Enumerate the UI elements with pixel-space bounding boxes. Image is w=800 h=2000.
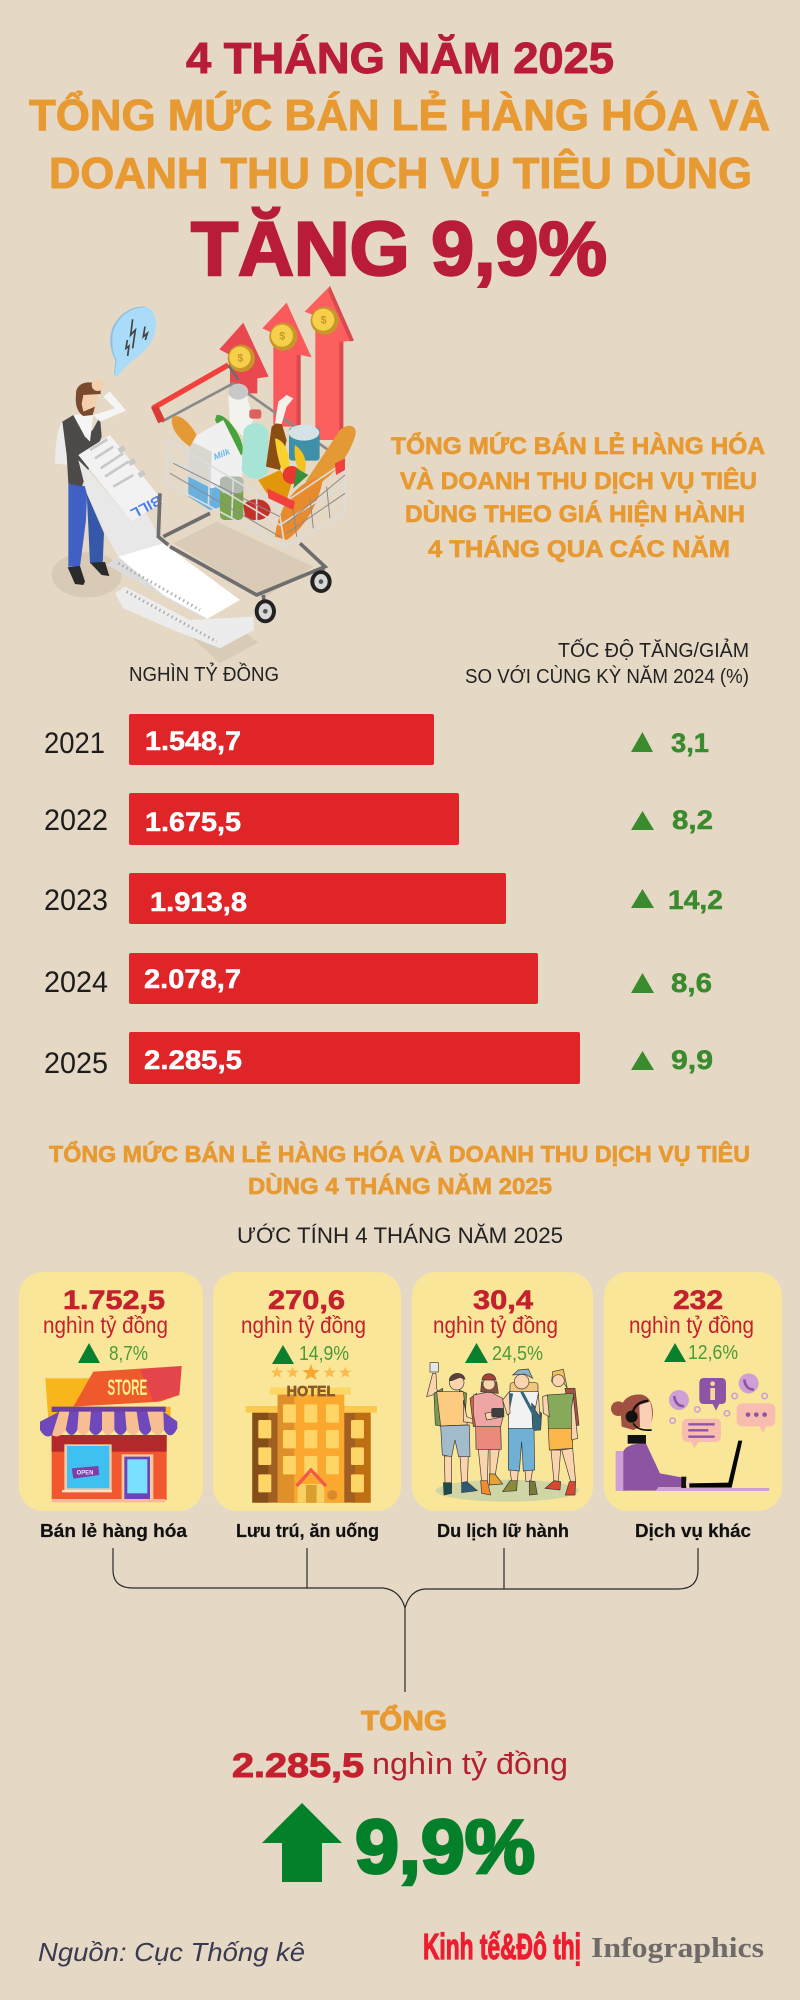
row 2023: 1.913,8	[150, 887, 247, 917]
row 2021: 1.548,7	[145, 726, 241, 756]
illustration: man reading bill beside shopping cart	[52, 286, 356, 663]
row 2023: 14,2	[668, 885, 723, 915]
category labels: Du lịch lữ hành	[437, 1521, 569, 1541]
title: DOANH THU DỊCH VỤ TIÊU DÙNG	[49, 148, 752, 198]
axis label: growth rate: SO VỚI CÙNG KỲ NĂM 2024 (%)	[465, 665, 749, 688]
illustration: man reading bill beside shopping cart: Milk	[212, 446, 232, 462]
row 2025: 2.285,5	[144, 1045, 242, 1075]
row 2024: 2024	[44, 966, 108, 999]
icon: store: STORE	[107, 1375, 147, 1400]
title: 4 THÁNG NĂM 2025	[186, 33, 614, 83]
row 2022	[44, 793, 713, 845]
category labels	[40, 1521, 751, 1541]
row 2021	[44, 714, 709, 765]
panel: accommodation: 270,6	[268, 1285, 345, 1315]
subtitle: 4 THÁNG QUA CÁC NĂM	[428, 535, 730, 563]
panel: accommodation: nghìn tỷ đồng	[241, 1312, 366, 1338]
section heading: DÙNG 4 THÁNG NĂM 2025	[248, 1172, 552, 1199]
panel: accommodation	[213, 1272, 401, 1511]
illustration: man reading bill beside shopping cart: $	[321, 315, 327, 327]
section subheading: ƯỚC TÍNH 4 THÁNG NĂM 2025	[237, 1223, 563, 1248]
row 2022: 8,2	[672, 805, 713, 835]
illustration: man reading bill beside shopping cart: BILL	[128, 492, 164, 522]
row 2023	[44, 873, 723, 924]
panel: other services: nghìn tỷ đồng	[629, 1312, 754, 1338]
bar chart	[44, 714, 723, 1084]
section heading: TỔNG MỨC BÁN LẺ HÀNG HÓA VÀ DOANH THU DỊCH VỤ TIÊU	[49, 1139, 750, 1167]
row 2022: 1.675,5	[145, 807, 241, 837]
title: TỔNG MỨC BÁN LẺ HÀNG HÓA VÀ	[29, 89, 770, 140]
subtitle	[391, 431, 765, 563]
row 2025	[44, 1032, 713, 1084]
panel: travel: 30,4	[473, 1285, 533, 1315]
panel: other services	[604, 1272, 782, 1511]
subtitle: VÀ DOANH THU DỊCH VỤ TIÊU	[400, 467, 757, 495]
icon: hotel	[246, 1364, 377, 1503]
panel: travel	[412, 1272, 593, 1511]
panel: travel: 24,5%	[492, 1343, 543, 1365]
row 2025: 9,9	[671, 1045, 713, 1075]
row 2022: 2022	[44, 804, 108, 837]
icon: tourists	[427, 1363, 579, 1502]
category labels: Dịch vụ khác	[635, 1521, 751, 1541]
title	[29, 33, 770, 292]
icon: hotel: HOTEL	[287, 1384, 335, 1400]
arrow: growth up	[262, 1803, 342, 1882]
category labels: Bán lẻ hàng hóa	[40, 1521, 188, 1541]
total growth: 9,9%	[355, 1805, 535, 1890]
row 2025: 2025	[44, 1047, 108, 1080]
row 2024	[44, 953, 712, 1004]
logo: Kinh tế&Đô thị	[423, 1926, 581, 1967]
row 2024: 8,6	[671, 968, 712, 998]
illustration: man reading bill beside shopping cart: $	[279, 331, 285, 343]
panel: retail: 8,7%	[109, 1343, 148, 1365]
source: Nguồn: Cục Thống kê	[38, 1937, 305, 1967]
section heading	[49, 1139, 750, 1199]
total label: TỔNG	[361, 1705, 447, 1736]
logo: Infographics	[591, 1933, 764, 1964]
panel: other services: 232	[673, 1285, 723, 1315]
panel: travel: nghìn tỷ đồng	[433, 1312, 558, 1338]
subtitle: DÙNG THEO GIÁ HIỆN HÀNH	[405, 500, 745, 528]
icon: store: OPEN	[77, 1471, 93, 1477]
panel: retail	[19, 1272, 203, 1511]
icon: store	[40, 1366, 182, 1502]
row 2021: 2021	[44, 727, 105, 760]
connector bracket	[113, 1548, 698, 1692]
total value	[232, 1746, 568, 1785]
axis label: unit: NGHÌN TỶ ĐỒNG	[129, 662, 279, 686]
subtitle: TỔNG MỨC BÁN LẺ HÀNG HÓA	[391, 431, 765, 460]
panel: accommodation: 14,9%	[299, 1343, 349, 1365]
row 2021: 3,1	[671, 728, 709, 758]
icon: call-centre agent	[611, 1373, 775, 1491]
row 2023: 2023	[44, 884, 108, 917]
panel: retail: 1.752,5	[63, 1285, 165, 1315]
category labels: Lưu trú, ăn uống	[236, 1521, 379, 1541]
total value: nghìn tỷ đồng	[372, 1746, 568, 1781]
panel: other services: 12,6%	[688, 1342, 738, 1364]
axis label: growth rate: TỐC ĐỘ TĂNG/GIẢM	[558, 638, 749, 662]
title: TĂNG 9,9%	[191, 207, 607, 292]
panel: retail: nghìn tỷ đồng	[43, 1312, 168, 1338]
row 2024: 2.078,7	[144, 964, 241, 994]
total value: 2.285,5	[232, 1747, 364, 1785]
illustration: man reading bill beside shopping cart: $	[237, 352, 243, 364]
axis label: growth rate	[465, 638, 749, 688]
